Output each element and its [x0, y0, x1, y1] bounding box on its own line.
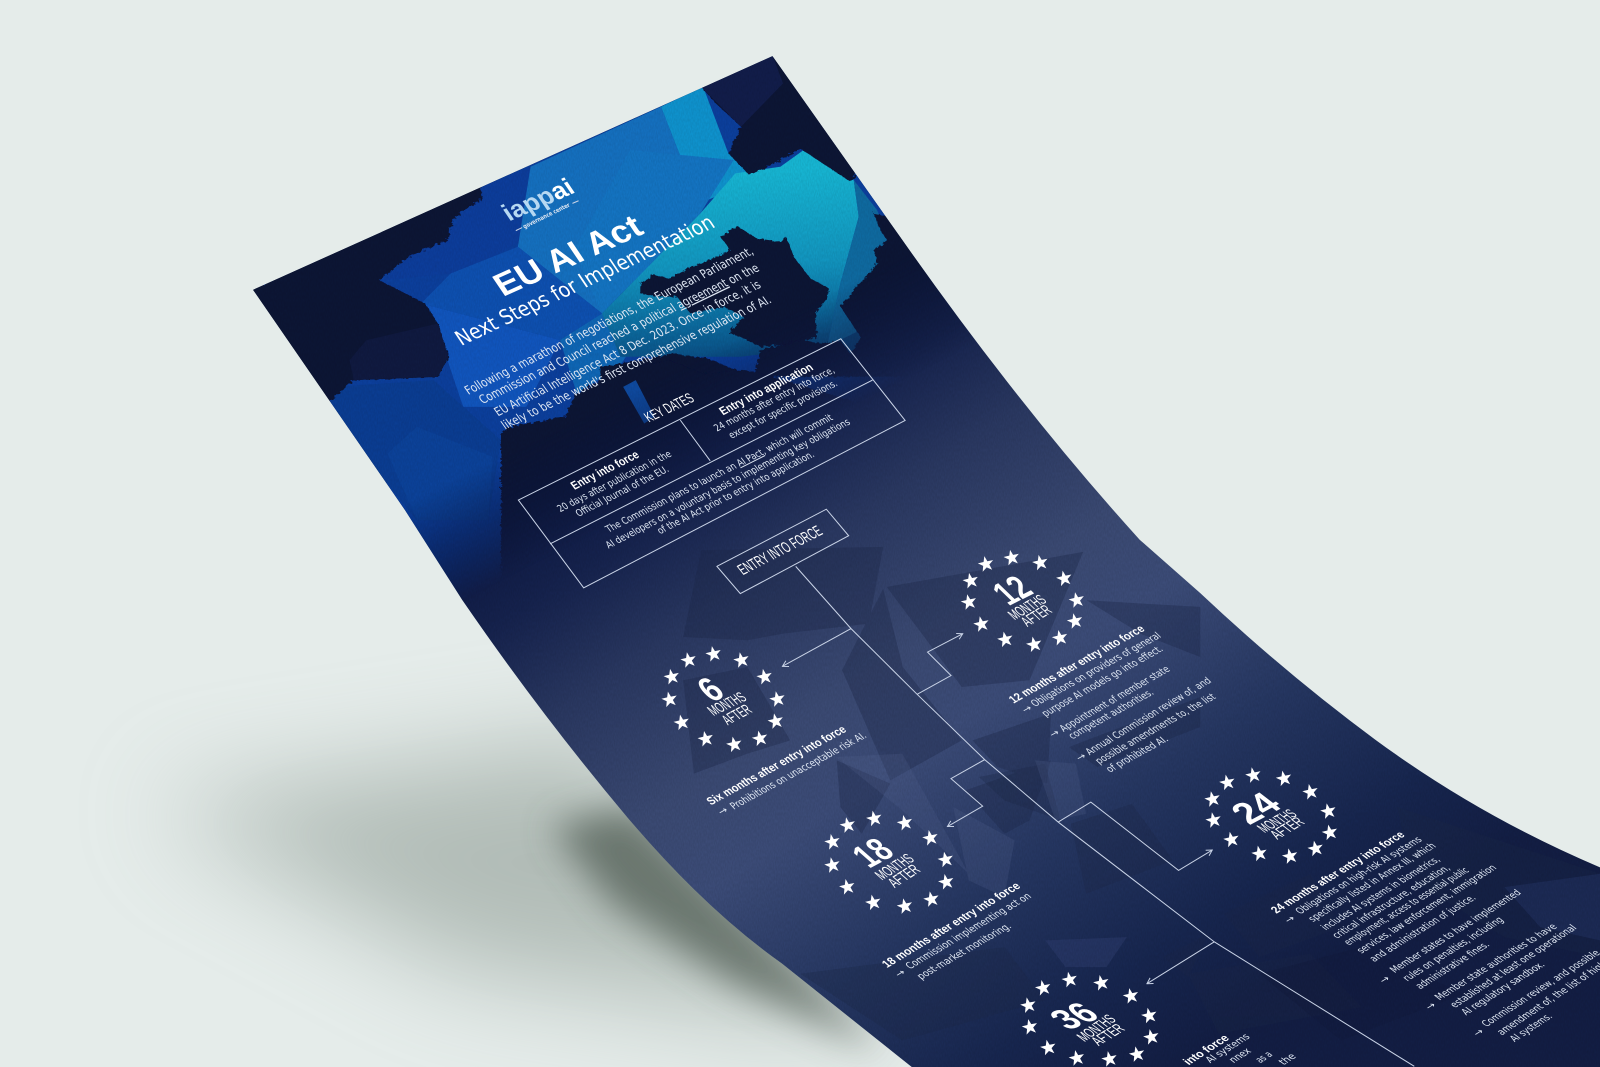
milestone: 18 months — [823, 809, 955, 914]
text: 24 months: critical infrastructure, education, — [1329, 863, 1453, 941]
milestone: 12 months: 12 — [984, 569, 1042, 612]
text: 24 months: 24 months after entry into force — [1268, 829, 1408, 916]
milestone: 12 months — [960, 548, 1086, 653]
entry into force date — [556, 452, 672, 516]
text: 12 months: Obligations on providers of general — [1028, 630, 1164, 709]
text: 18 months: Commission implementing act on — [902, 890, 1034, 971]
text: 12 months: of prohibited AI. — [1103, 733, 1171, 775]
poster sheet — [253, 56, 1600, 1067]
text: 12 months: competent authorities. — [1065, 687, 1157, 741]
text: 24 months: → — [1377, 974, 1394, 986]
text: 18 months: 18 months after entry into force — [879, 880, 1024, 970]
milestone: 24 months: AFTER — [1266, 814, 1309, 842]
milestone: 6 months: 6 — [689, 670, 733, 710]
text: 24 months: and administration of justice. — [1366, 892, 1479, 964]
intro paragraph: Commission and Council reached a political agreement on the — [476, 261, 763, 407]
text: 24 months: specifically listed in Annex III, which — [1305, 841, 1439, 924]
panel: key dates — [518, 339, 905, 588]
text: 24 months: Obligations on high-risk AI systems — [1292, 834, 1425, 916]
text: 24 months: AI regulatory sandbox. — [1458, 959, 1548, 1017]
text: 12 months: Appointment of member state — [1056, 663, 1173, 734]
paper grain — [332, 88, 1286, 968]
timeline — [796, 566, 1414, 1066]
arrow: to 12 months — [917, 634, 963, 694]
text: 24 months: → — [1471, 1027, 1488, 1039]
milestone: 36 months: 36 — [1041, 997, 1109, 1036]
arrow: to 6 months — [782, 629, 851, 666]
text: 36 months: as a — [1252, 1049, 1275, 1065]
milestone: 12 months: AFTER — [1017, 602, 1056, 630]
text: 6 months: Prohibitions on unacceptable risk AI. — [727, 730, 869, 812]
text: 24 months: → — [1423, 1001, 1440, 1012]
logo: iappai — [497, 174, 580, 226]
milestone: 36 months: MONTHS — [1073, 1012, 1120, 1045]
text: 24 months: administrative fines. — [1412, 939, 1493, 991]
text: 36 months: nnex — [1226, 1046, 1254, 1065]
arrow: to 24 months — [1058, 802, 1212, 870]
milestone: 36 months — [1019, 970, 1160, 1067]
milestone: 6 months — [660, 644, 786, 753]
AI Pact note: AI developers on a voluntary basis to implementing key obligations — [604, 417, 853, 551]
subtitle: Next Steps for Implementation — [451, 211, 720, 351]
milestone: 24 months — [1203, 766, 1339, 864]
text: 12 months: purpose AI models go into effect. — [1039, 643, 1166, 719]
logo: governance center — [522, 202, 572, 230]
milestone: 6 months: AFTER — [718, 702, 756, 728]
text: 24 months: AI systems. — [1507, 1011, 1555, 1044]
text: 12 months: Annual Commission review of, and — [1082, 675, 1214, 757]
AI Pact note: of the AI Act prior to entry into application. — [655, 450, 817, 537]
text: 24 months: includes AI systems in biometrics, — [1318, 854, 1443, 932]
text: 36 months: AI systems — [1202, 1031, 1253, 1065]
map artwork: low-poly blue sea with dark land — [253, 56, 967, 590]
text: 24 months — [1268, 829, 1600, 1044]
text: 36 months: into force — [1180, 1032, 1232, 1067]
entry into force box: ENTRY INTO FORCE — [734, 523, 826, 578]
text: 24 months: services, law enforcement, immigration — [1354, 862, 1499, 956]
text: 12 months: → — [1074, 751, 1090, 763]
text: 24 months: Member states to have implemented — [1387, 887, 1524, 975]
title: EU AI Act — [487, 209, 650, 304]
text: 36 months — [1182, 1034, 1296, 1065]
entry into force date: Entry into force — [568, 448, 642, 492]
milestone: 36 months: AFTER — [1088, 1021, 1129, 1049]
text: 24 months: employment, access to essential public — [1341, 865, 1472, 947]
text: 6 months: Six months after entry into force — [704, 723, 849, 808]
text: 12 months: → — [1047, 728, 1063, 740]
entry into force date: 20 days after publication in the — [555, 449, 674, 515]
entry into force box — [717, 509, 849, 594]
western land masses — [253, 56, 856, 570]
milestone: 18 months: 18 — [844, 832, 903, 875]
right-hand sea and land detail — [598, 150, 967, 380]
arrow: to 18 months — [947, 760, 985, 827]
milestone: 6 months: MONTHS — [704, 689, 750, 719]
milestone: 24 months: MONTHS — [1254, 807, 1301, 836]
low-poly facets — [683, 547, 1600, 1040]
text: 36 months: the — [1276, 1051, 1299, 1067]
intro paragraph: EU Artificial Intelligence Act 8 Dec. 2023. Once in force, it is — [492, 278, 764, 420]
text: 18 months: post-market monitoring. — [914, 920, 1014, 982]
milestone: 18 months: AFTER — [884, 862, 924, 891]
text: 6 months — [706, 727, 866, 814]
poster shadow — [153, 735, 883, 1051]
milestone: 12 months: MONTHS — [1004, 592, 1050, 623]
text: 12 months: → — [1020, 703, 1036, 715]
AI Pact note: The Commission plans to launch an AI Pact, which will commit — [603, 413, 835, 535]
intro paragraph: likely to be the world's first comprehensive regulation of AI. — [499, 293, 775, 433]
entry into application date: Entry into application — [716, 361, 816, 418]
text: 12 months: possible amendments to, the list — [1092, 691, 1219, 766]
key dates heading: KEY DATES — [641, 390, 698, 426]
entry into application date: except for specific provisions. — [727, 379, 840, 441]
entry into application date: 24 months after entry into force, — [712, 366, 837, 434]
text: 18 months: → — [893, 968, 909, 980]
text: 12 months: 12 months after entry into force — [1006, 623, 1148, 706]
text: 6 months: → — [716, 805, 731, 818]
milestone: 24 months: 24 — [1222, 786, 1291, 831]
text: 24 months: rules on penalties, including — [1399, 915, 1507, 983]
text: 24 months: → — [1282, 914, 1299, 925]
text: 24 months: Member state authorities to have — [1432, 921, 1560, 1002]
arrow: to 36 months — [1147, 942, 1214, 984]
entry into application date — [713, 365, 838, 438]
text: 12 months — [1006, 623, 1219, 775]
intro paragraph: Following a marathon of negotiations, the European Parliament, — [461, 244, 756, 397]
milestone: 18 months: MONTHS — [871, 851, 918, 883]
entry into force date: Official Journal of the EU. — [574, 465, 671, 519]
